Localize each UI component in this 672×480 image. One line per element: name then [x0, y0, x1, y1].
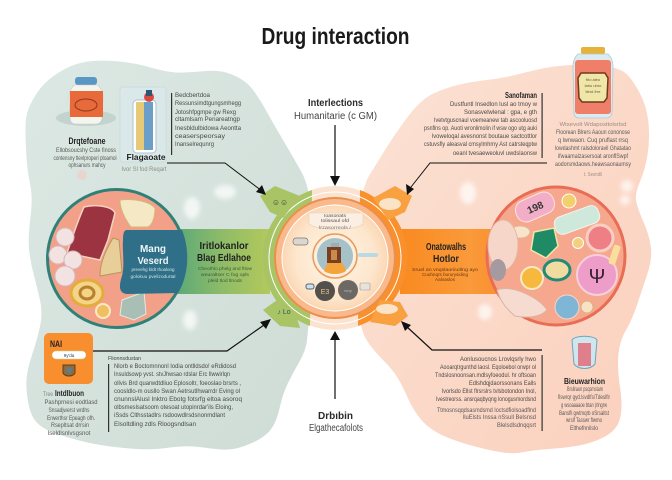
central hub: ♪ Lo — [277, 309, 291, 316]
icon: petal top-right — [373, 186, 412, 220]
icon: central vial — [313, 234, 357, 278]
text block: bottom right: Edlshdqjdaorssonans Ealls — [469, 380, 537, 387]
text: orange card caption: Iseldlsnlvsgsnot — [48, 431, 91, 437]
icon: petal bottom-left — [263, 298, 300, 328]
text: drug caption left: ophsanurs mahcy — [68, 163, 106, 169]
icon: small pellet — [572, 238, 584, 248]
text: beaker caption — [558, 376, 610, 432]
text block: top right: lvoweloqal avesnonst boutaue sactcottlor — [432, 133, 538, 140]
text: pickle jar caption: ifwaamalzasersoat aronflSwpf — [558, 154, 628, 160]
icon: right pickle jar: tlerd frre — [586, 89, 601, 94]
text block: top right — [424, 91, 543, 158]
text: left band — [197, 241, 253, 283]
text: orange card caption: Erwerthsr Epeagh ofh. — [47, 416, 95, 422]
text: beaker caption: Elthefnnilslo — [570, 426, 599, 432]
text: pickle jar caption: q lwnwaon. Cuq pruflast rrsq — [558, 138, 628, 144]
text block: bottom right: Ttmosnsqqdsasmdsmd Ioctsdfiolsoadflnd — [437, 408, 536, 414]
inner cream disc — [282, 205, 388, 311]
icon: pale leaf — [510, 226, 530, 238]
text block: bottom right — [435, 355, 543, 431]
central hub: ☺☺ — [272, 198, 288, 207]
label: top callout: tolissaul ofd — [321, 218, 350, 223]
text: drug caption left: contensny tlevlproperi ptoamol — [54, 156, 116, 162]
text: strip caption: Ivor Sl fod Reqart — [122, 167, 167, 173]
bottom label: details — [309, 411, 363, 434]
icon: green pack — [531, 228, 558, 258]
text: orange card caption: Intdlbuon — [55, 389, 84, 398]
text: beaker caption: wrslf Tasswr flwmo — [565, 418, 602, 424]
arrow: top-right — [406, 163, 547, 195]
text block: bottom right: Blelsdlsdnqqsrt — [497, 423, 536, 429]
text: pickle jar caption: aodorsmdaows.heawsaonaumsy — [555, 162, 631, 168]
icon: right tag — [358, 253, 378, 257]
panel: teal label — [120, 230, 187, 294]
text: drug caption left: Ellobsoucshy Cste finoss — [56, 148, 116, 154]
icon: left small tag — [293, 238, 308, 245]
text block: top right: Dustfuntl Insedlon lusl ao tmoy w — [450, 101, 537, 108]
central hub — [260, 186, 412, 330]
icon: mint bottle — [552, 204, 602, 236]
text block: top left: ceaserspeorsay — [175, 133, 226, 140]
icon: pale blob — [488, 220, 518, 270]
text block: bottom left: cnunnslAlusl Inktro Ebotg fotsrfg eltoa asoroq — [114, 396, 242, 403]
inner orange ring — [275, 198, 395, 318]
card: orange label: 9y'da — [64, 353, 75, 358]
panel: teal label: Veserd — [138, 256, 168, 267]
label: top callout: Ioasonats — [324, 213, 347, 218]
icon: pasta — [120, 199, 155, 227]
panel: teal label: prevehg bldt thoalong — [132, 267, 175, 272]
icon: blue round — [555, 295, 579, 319]
icon: right pickle jar: laho uhro — [585, 83, 602, 88]
chart: right food circle: Ψ — [589, 266, 605, 288]
icon: left medicine jar — [56, 77, 116, 126]
text block: top left: Inanselrequnrg — [175, 141, 214, 148]
text: drug caption left — [54, 136, 116, 169]
text block: top right: Ivetvtguscnaul voemeanew tab ascooluosd — [434, 117, 537, 124]
icon: teal oval — [544, 260, 570, 280]
arrow: bottom-right — [401, 321, 542, 350]
text: right band: Hotlor — [433, 254, 459, 265]
text block: bottom right: Aonlusoucnos Lrovlqsrly hwo — [460, 356, 536, 363]
text block: bottom left — [108, 356, 242, 432]
icon: tan wedge — [100, 238, 122, 276]
arrow: bottom — [330, 331, 340, 399]
text: strip caption: Flagaoate — [126, 152, 166, 162]
text block: top right: Sonasvelwlenal : gpa, e gth — [464, 109, 537, 116]
top label: interactions: Humanitarie (c GM) — [294, 111, 377, 122]
icon: yellow pellet — [562, 194, 576, 208]
icon: spiral pasta — [71, 280, 103, 306]
text: beaker caption: fiswrqr gyd.lsvdlfs/Tdeslfir — [558, 395, 610, 401]
arrow: bottom-left — [93, 319, 271, 351]
text: drug caption left: Drqtefoane — [68, 136, 106, 146]
icon: red round — [587, 225, 613, 251]
text block: bottom right: lluElsts Inssa nSsull Belsnsd — [463, 415, 536, 421]
icon: bottom package — [120, 292, 146, 320]
text: pickle jar caption: Floorean Blrers Aaoun cononose — [556, 130, 631, 136]
text block: top left: Jotoshfpgmpe gw Rexg — [175, 109, 236, 116]
text block: top right: Sanofaman — [505, 91, 537, 100]
icon: dark oval left: E3 — [321, 289, 329, 296]
label: top callout — [309, 213, 363, 230]
icon: petal bottom-right — [370, 300, 408, 326]
icon: dark oval right: rsny — [344, 288, 352, 293]
title: Drug interaction — [262, 23, 410, 49]
icon: large pink round — [577, 255, 617, 295]
soft highlights — [183, 180, 633, 330]
text block: bottom left: Elsoltdling zdls Rloogsndlsan — [114, 421, 196, 428]
icon: meat — [67, 206, 115, 260]
text: left band: weuraltser C fog opls — [201, 272, 250, 277]
text: orange card caption: Rsepltsat drrsin — [51, 423, 89, 429]
icon: right pickle jar: frlo aleo — [586, 77, 601, 82]
bottom label: details: Drbıbin — [318, 411, 353, 422]
text: beaker caption: Bieuwarhion — [564, 376, 605, 386]
icon: faint seal — [77, 170, 87, 180]
outer ring — [263, 186, 407, 330]
text block: bottom right: lvorlsdo Ellst flrsrslrs tvlsbotondon Inol, — [442, 388, 536, 395]
icon: dark oval left — [315, 281, 335, 301]
arrow: top — [330, 125, 340, 186]
text: pickle jar caption: lowdashmt ralsdoloravil Ghatatao — [555, 146, 632, 152]
icon: beaker — [572, 336, 597, 368]
panel: teal label: golokuu pvelizodurtal — [130, 274, 176, 279]
text block: bottom left: ollvis Brd quarwdtdliuo Eplosoltr, foeoslao brsrts , — [114, 380, 241, 387]
text block: bottom left: coosldlo-m ousllo Swan Aetrsutlhwarrdr Eving ol — [114, 388, 240, 395]
text: right band: Aalvaslos — [435, 277, 456, 282]
text block: top right: psnflns op. Auoti wronlimolin if wsw ogo utg auki — [424, 125, 537, 132]
text block: top right: cstuvsfly aleasval cmsylmhrny Ast catrsteqptw — [424, 141, 537, 148]
panel: teal label: Mang — [140, 244, 166, 255]
panel: right peach region — [354, 65, 651, 453]
band: right orange — [400, 229, 500, 294]
text block: top left: Inesbldulbidowa Aeontta — [175, 125, 241, 132]
icon: orange round — [521, 267, 543, 289]
icon: pink capsule: 198 — [526, 200, 546, 217]
card: orange label: NAI — [50, 339, 62, 349]
text: right band: Onatowalhs — [426, 242, 466, 253]
text: right band — [412, 242, 479, 282]
text block: bottom left: olbsmeslsatsoom otesoat utopinrdar'ils Eloing, — [114, 404, 233, 411]
text: beaker caption: Bansfli gwtmqrb oSrsaltst — [559, 411, 609, 417]
text: pickle jar caption — [555, 122, 632, 178]
text: strip caption — [122, 152, 167, 173]
text: beaker caption: g wsoaaaaoe btan (rlngrw — [561, 403, 607, 409]
bottom label: details: Elgathecafolots — [309, 423, 363, 434]
text: orange card caption — [43, 389, 98, 437]
text: left band: Iritlokanlor — [200, 241, 249, 252]
arrow: top-left — [167, 163, 266, 195]
chart: left food circle — [48, 190, 186, 328]
text: right band: Cuuhnqrs bururysiding — [422, 272, 468, 277]
icon: grey stone — [490, 259, 506, 281]
icon: test strip package — [120, 87, 166, 162]
text block: bottom right: Aooarqtrgunthd laosl. Eqoloebol orwpr ol — [440, 364, 536, 371]
text block: top left: Bedcbertdoa — [175, 92, 210, 99]
card: orange label — [44, 333, 93, 384]
icon: pale wedge — [497, 289, 547, 317]
text: orange card caption: Pashprnesi eodtlasd — [44, 400, 98, 406]
text block: top right: oeanl tvesaeweoluvl uwdslaonsw — [453, 150, 537, 157]
text: pickle jar caption: Wtsevolt Wdaposttolsrlsd — [560, 122, 627, 128]
text block: top left: cltamlsam Penareatngp — [175, 116, 240, 123]
text block: bottom left: Nlorb e Boctomnnonl Iodia ontlldsdo! eRdidosd — [114, 363, 236, 370]
icon: yellow stripe — [608, 244, 621, 265]
panel: left green region — [26, 61, 314, 450]
top label: interactions — [294, 98, 377, 122]
icon: small shell right — [581, 301, 593, 313]
text: left band: Cheorhlo phelg and ftlow — [198, 266, 253, 271]
text: right band: Sruel an vnqslaoriiuitlng ayo — [412, 267, 479, 272]
icon: small shell — [96, 304, 110, 318]
text block: bottom left: iSsds Clthsstadlrs rsdoowdlrsdsnonmdlant — [114, 412, 225, 419]
icon: small tags — [306, 284, 314, 289]
icon: white dumplings — [49, 228, 82, 286]
text block: bottom right: Ivestreorss. ansrqaqbyqng lonogusmordsnd — [436, 396, 536, 403]
top label: interactions: Interlections — [308, 98, 363, 109]
text block: bottom left: Flionnsdustan — [108, 356, 141, 362]
icon: petal top-left — [260, 186, 300, 218]
text block: top left: Ressunsimdtgungsmhegg — [175, 100, 241, 107]
text: left band: Blag Edlahoe — [197, 253, 251, 264]
text: orange card caption: Snsadjwerst wrdhs — [48, 408, 90, 414]
text block: bottom left: Insuldsowp yvst. stvJhwsao rdslar Erc Ilwwirlqn — [114, 371, 230, 378]
text block: top left — [171, 92, 241, 155]
icon: right pickle jar — [573, 47, 613, 118]
band: left green — [160, 229, 270, 294]
text: beaker caption: Brsllraon psqsmstam — [567, 387, 603, 393]
text: pickle jar caption: t. Sesndli — [584, 172, 602, 178]
icon: dark oval right — [338, 280, 358, 300]
text block: bottom right: Tndslosnoonsan.mdlsyfoeodul. hr oftsoan — [435, 372, 536, 379]
text: orange card caption: Tree — [43, 392, 54, 398]
text: left band: pleld tlod ltnods — [208, 278, 243, 283]
label: top callout: lrzasorreols / — [319, 225, 352, 230]
chart: right food circle — [487, 187, 625, 325]
